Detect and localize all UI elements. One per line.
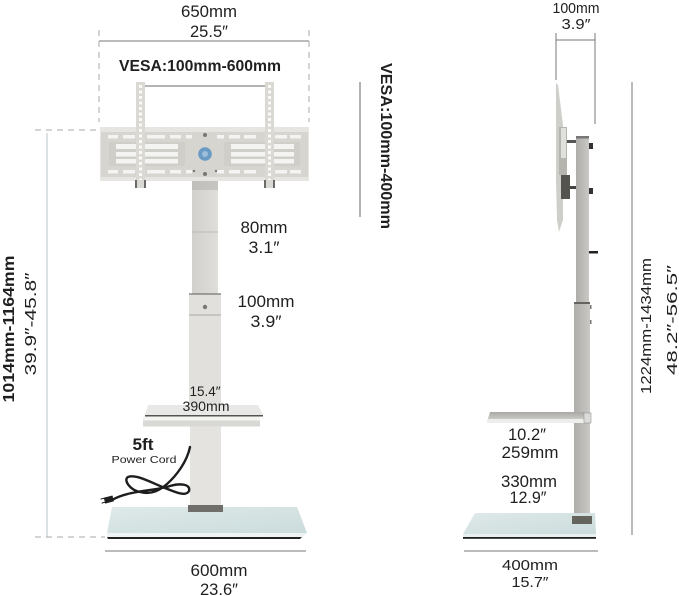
dimension: side depth 100mm [552,0,600,124]
dimension: base depth 400mm [464,551,598,591]
icon: power cord [101,447,190,503]
dimension: base depth 400mm: 15.7″ [512,574,549,591]
label: base depth 330mm: 330mm [501,473,557,491]
shelf width label [182,383,230,414]
left vertical rail [135,82,146,188]
dimension: base width 600mm [105,551,306,596]
label: column height 100mm: 100mm [238,293,294,311]
dimension: side depth 100mm: 3.9″ [562,16,591,33]
label: power cord length: 5ft [132,435,154,454]
shelf width label: 15.4″ [190,383,221,399]
label: base depth 330mm [501,473,557,507]
dimension: base depth 400mm: 400mm [502,557,558,574]
dimension: VESA vertical range: VESA:100mm-400mm [377,63,394,229]
dimension: overall height right [632,82,679,535]
front view: glass base [107,505,307,539]
dimension: top width 650mm: 650mm [181,3,237,21]
side view: stand column [574,136,598,518]
heading: VESA horizontal range: VESA:100mm-600mm [119,58,281,75]
dimension: overall height left [1,133,105,537]
dimension: overall height right: 1224mm-1434mm [638,258,655,394]
label: column height 100mm: 3.9″ [250,313,282,331]
front view: stand column [189,181,221,508]
dimension: base width 600mm: 600mm [190,562,248,580]
front view: glass shelf [143,405,263,426]
label: shelf depth side [502,426,558,462]
shelf width label: 390mm [182,398,230,414]
dimension: overall height left: 39.9″-45.8″ [23,272,40,375]
label: base depth 330mm: 12.9″ [510,489,547,507]
label: column height 100mm [238,293,294,331]
side view: glass base [463,513,596,539]
label: column height 80mm: 80mm [240,219,288,237]
label: power cord length [112,435,177,466]
right vertical rail [264,82,275,188]
front view: TV bracket [35,82,309,188]
side view: TV bracket [556,83,593,232]
dimension: top width 650mm: 25.5″ [190,23,228,41]
dimension: overall height left: 1014mm-1164mm [1,256,18,402]
dimension: side depth 100mm: 100mm [552,0,600,17]
label: power cord length: Power Cord [112,454,177,466]
label: column height 80mm [240,219,288,257]
label: column height 80mm: 3.1″ [248,239,280,257]
label: shelf depth side: 10.2″ [508,426,546,444]
dimension: top width 650mm [99,3,309,122]
label: shelf depth side: 259mm [502,444,558,462]
side view: shelf [487,412,591,423]
